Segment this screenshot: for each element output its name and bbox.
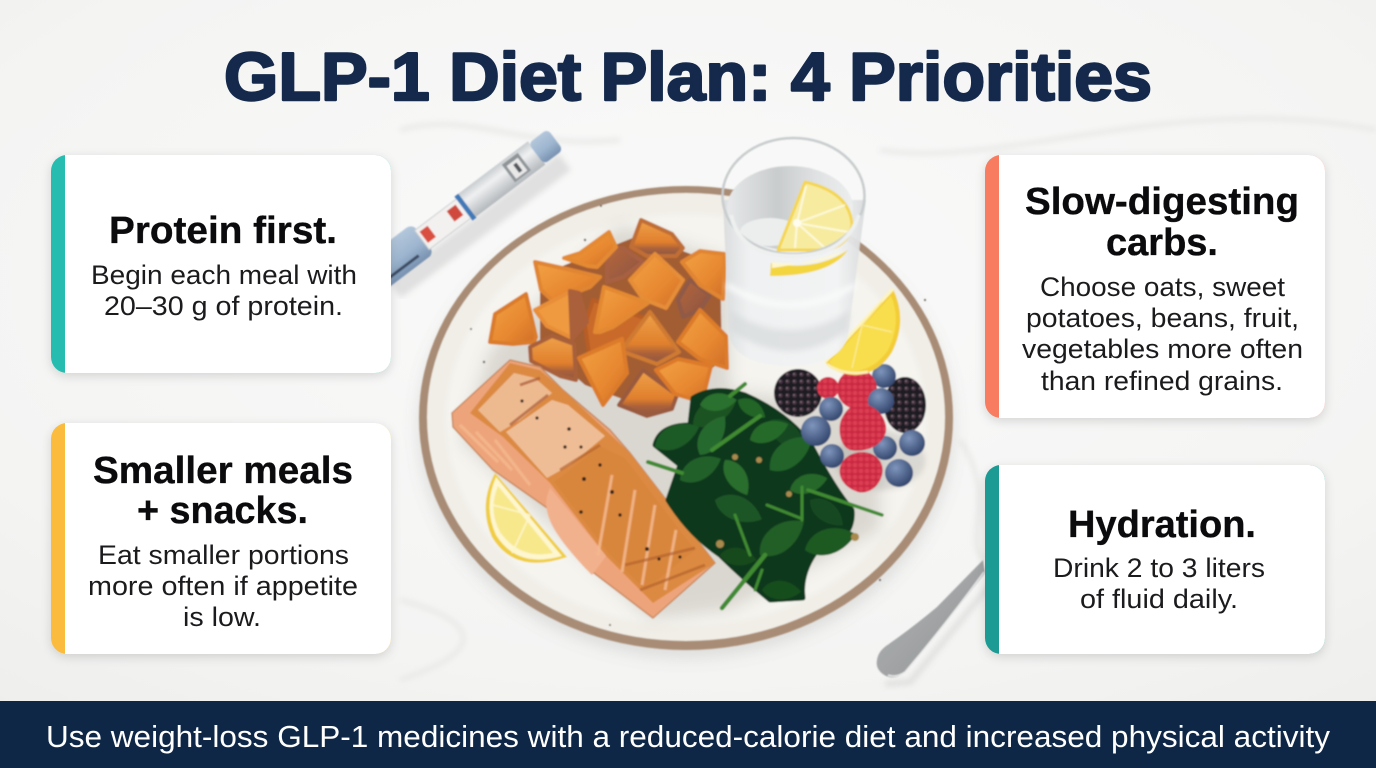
text: protein advice: 20–30 g of protein. <box>104 291 343 321</box>
food shadow <box>460 225 880 620</box>
card: protein first <box>51 155 391 373</box>
text: meal advice: more often if appetite <box>88 571 358 601</box>
heading: protein first: Protein first. <box>109 210 337 252</box>
heading: smaller meals + snacks: Smaller meals <box>93 450 353 492</box>
plate with food <box>418 186 954 658</box>
text: hydration advice: Drink 2 to 3 liters <box>1053 553 1265 583</box>
text: carb advice: potatoes, beans, fruit, <box>1026 303 1299 333</box>
glass of water with lemon <box>722 138 866 366</box>
title: GLP-1 Diet Plan: 4 Priorities <box>224 39 1152 115</box>
heading: smaller meals + snacks <box>93 450 353 532</box>
heading: slow-digesting carbs: carbs. <box>1106 222 1218 264</box>
heading: slow-digesting carbs: Slow-digesting <box>1025 181 1299 223</box>
heading: hydration: Hydration. <box>1068 504 1256 546</box>
plate <box>418 186 954 658</box>
text: protein advice: Begin each meal with <box>91 260 357 290</box>
text: meal advice: is low. <box>183 602 261 632</box>
text: protein advice <box>91 260 357 321</box>
heading: slow-digesting carbs <box>1025 181 1299 264</box>
card: smaller meals <box>51 423 391 654</box>
text: carb advice <box>1022 272 1303 396</box>
text: carb advice: vegetables more often <box>1022 334 1303 364</box>
icon: injection pen <box>363 124 566 290</box>
card: hydration <box>985 465 1325 654</box>
text: carb advice: Choose oats, sweet <box>1040 272 1286 302</box>
sweet potatoes <box>490 220 727 416</box>
card: slow-digesting carbs <box>985 155 1325 418</box>
text: hydration advice <box>1053 553 1265 614</box>
lemon wedge beside salmon <box>486 473 567 563</box>
spinach <box>648 384 882 608</box>
mixed berries <box>774 364 926 492</box>
text: meal advice: Eat smaller portions <box>98 540 349 570</box>
footer text: Use weight-loss GLP-1 medicines with a reduced-calorie diet and increased physical activity <box>46 719 1331 754</box>
salmon fillet <box>452 360 715 618</box>
icon: spoon handle <box>877 560 990 684</box>
text: carb advice: than refined grains. <box>1041 366 1283 396</box>
text: hydration advice: of fluid daily. <box>1080 584 1238 614</box>
text: meal advice <box>88 540 358 632</box>
lemon slice in glass <box>770 182 852 276</box>
heading: smaller meals + snacks: + snacks. <box>137 490 308 532</box>
footer banner <box>0 701 1376 768</box>
lemon wedge beside glass <box>825 289 900 375</box>
